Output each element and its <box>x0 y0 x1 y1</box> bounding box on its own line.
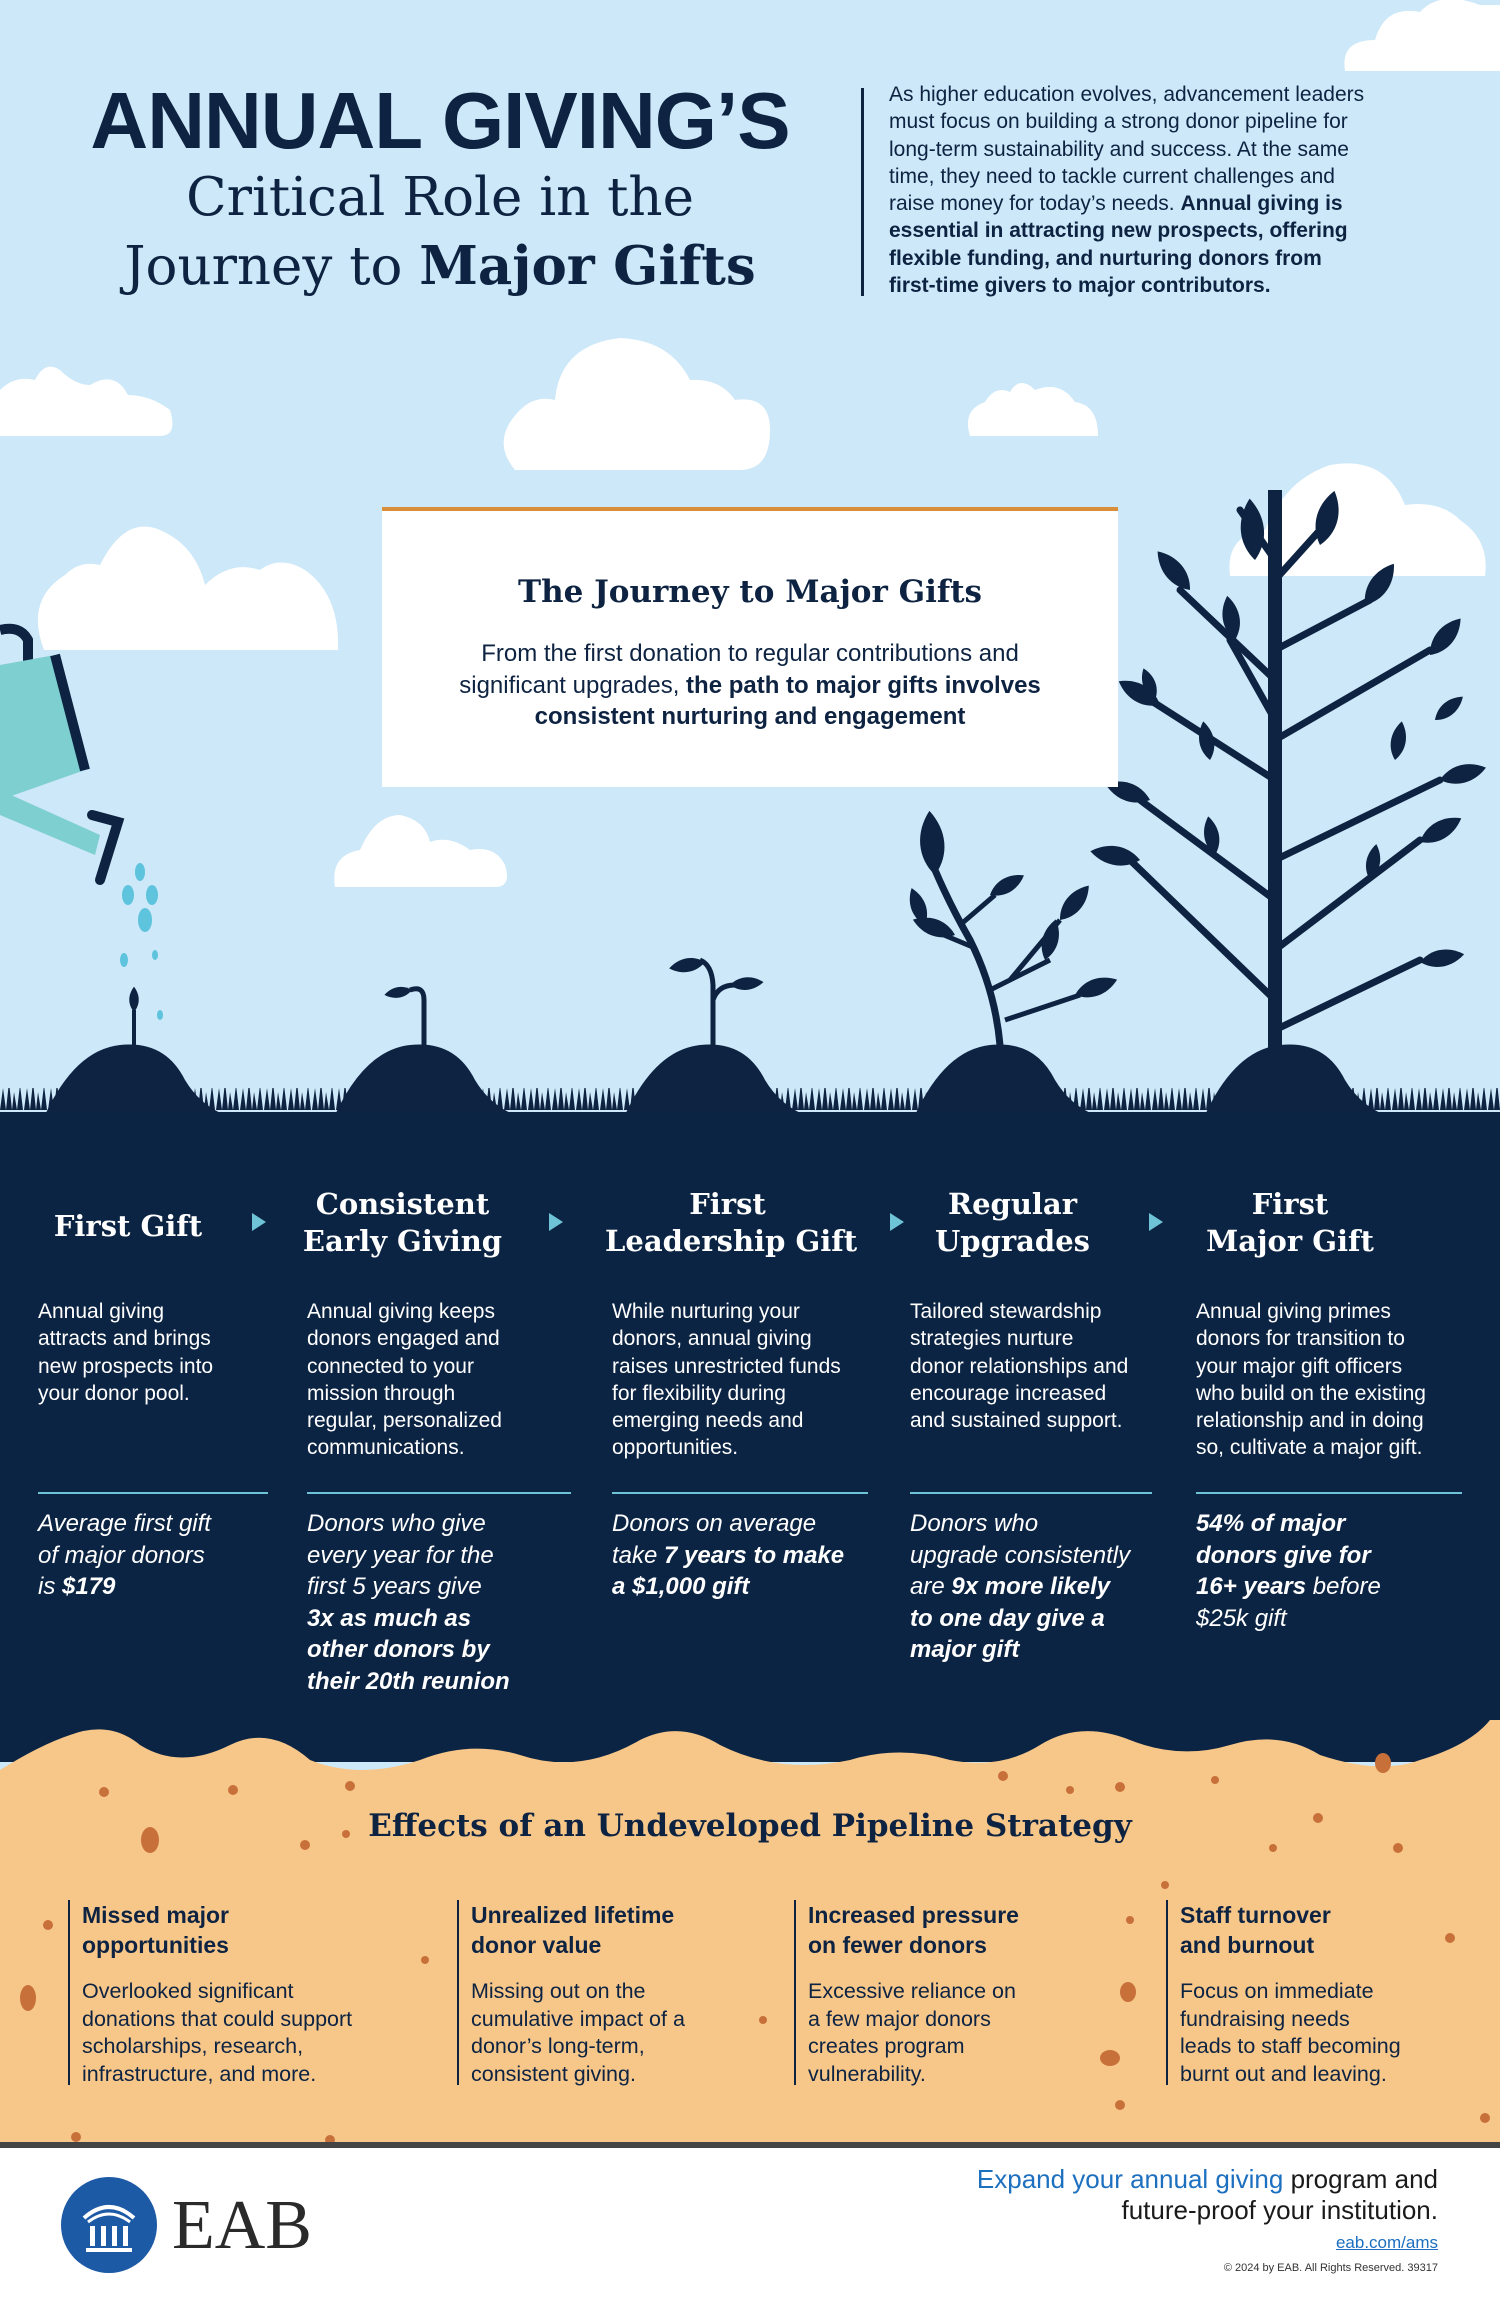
effect: unrealized value: cumulative impact of a <box>471 2006 685 2030</box>
stage: First Leadership Gift: raises unrestricted funds <box>612 1355 841 1378</box>
stage: First Major Gift: Annual giving primes <box>1196 1300 1391 1323</box>
logo: EAB <box>61 2177 312 2273</box>
stage: Regular Upgrades: Donors who <box>910 1510 1038 1537</box>
stage: First Gift: First Gift <box>54 1209 202 1243</box>
stage: Consistent Early Giving: communications. <box>307 1436 465 1459</box>
arrow <box>1149 1213 1163 1231</box>
effect: increased pressure: creates program <box>808 2034 965 2058</box>
effect: missed opportunities: Overlooked significant <box>82 1979 294 2003</box>
panel: journey box <box>382 507 1118 787</box>
effect: staff turnover: Staff turnover <box>1180 1902 1331 1928</box>
stage: Regular Upgrades: are 9x more likely <box>910 1573 1110 1600</box>
intro paragraph: essential in attracting new prospects, offering <box>889 219 1348 242</box>
stage: Consistent Early Giving: other donors by <box>307 1636 490 1663</box>
effect: missed opportunities: infrastructure, and more. <box>82 2062 316 2086</box>
effect: missed opportunities <box>68 1900 428 2085</box>
footer call to action: Expand your annual giving program and <box>977 2164 1438 2194</box>
stage: First Leadership Gift: take 7 years to make <box>612 1542 844 1569</box>
effect: unrealized value: Missing out on the <box>471 1979 646 2003</box>
title: Journey to Major Gifts <box>124 235 756 297</box>
stage: First Major Gift: who build on the existing <box>1196 1382 1426 1405</box>
effect: unrealized value: donor’s long-term, <box>471 2034 645 2058</box>
journey heading: The Journey to Major Gifts <box>518 574 982 610</box>
stage: Regular Upgrades: Upgrades <box>935 1224 1090 1258</box>
title: ANNUAL GIVING’S <box>90 76 790 165</box>
stage: Consistent Early Giving: Consistent <box>316 1187 489 1221</box>
stage: Consistent Early Giving: Annual giving keeps <box>307 1300 495 1323</box>
stage: Regular Upgrades: strategies nurture <box>910 1327 1073 1350</box>
effect: increased pressure: a few major donors <box>808 2006 991 2030</box>
stage: First Major Gift: 54% of major <box>1196 1510 1345 1537</box>
effect: unrealized value: donor value <box>471 1932 601 1958</box>
intro divider <box>861 88 864 296</box>
stage: First Gift: your donor pool. <box>38 1382 190 1405</box>
stage: First Gift: is $179 <box>38 1573 115 1600</box>
stage: First Major Gift: so, cultivate a major gift. <box>1196 1436 1422 1459</box>
title: Critical Role in the <box>186 167 694 228</box>
journey text: significant upgrades, the path to major gifts involves <box>459 672 1041 698</box>
stage: Consistent Early Giving: donors engaged and <box>307 1327 500 1350</box>
arrow <box>252 1213 266 1231</box>
stage: Consistent Early Giving: mission through <box>307 1382 455 1405</box>
stage: Consistent Early Giving: every year for the <box>307 1542 494 1569</box>
effect: unrealized value: consistent giving. <box>471 2062 636 2086</box>
intro paragraph: As higher education evolves, advancement leaders <box>889 83 1364 106</box>
stage: First Major Gift: your major gift officers <box>1196 1355 1402 1378</box>
stage: Consistent Early Giving: Donors who give <box>307 1510 486 1537</box>
effects heading: Effects of an Undeveloped Pipeline Strategy <box>368 1808 1132 1844</box>
stage: First Gift: Average first gift <box>38 1510 211 1537</box>
stage: First Gift: attracts and brings <box>38 1327 211 1350</box>
stage: First Gift: new prospects into <box>38 1355 213 1378</box>
stage: First Gift: of major donors <box>38 1542 205 1569</box>
effect: unrealized value <box>457 1900 757 2085</box>
stage: First Major Gift: Major Gift <box>1206 1224 1374 1258</box>
intro paragraph: raise money for today’s needs. Annual giving is <box>889 192 1343 215</box>
footer call to action: eab.com/ams <box>1336 2233 1438 2252</box>
stage: First Major Gift: $25k gift <box>1196 1605 1287 1632</box>
stage: Regular Upgrades: Regular <box>948 1187 1077 1221</box>
journey text <box>459 640 1041 730</box>
journey text: From the first donation to regular contributions and <box>481 640 1019 667</box>
stage: First Leadership Gift: Leadership Gift <box>605 1224 857 1258</box>
intro paragraph: must focus on building a strong donor pipeline for <box>889 110 1348 133</box>
stage: First Major Gift: donors give for <box>1196 1542 1371 1569</box>
effect: missed opportunities: opportunities <box>82 1932 229 1958</box>
intro paragraph: time, they need to tackle current challenges and <box>889 165 1335 188</box>
effect: increased pressure: on fewer donors <box>808 1932 987 1958</box>
stage: Regular Upgrades: to one day give a <box>910 1605 1105 1632</box>
stage: Regular Upgrades: Tailored stewardship <box>910 1300 1101 1323</box>
panel: journey stages <box>36 1187 1462 1695</box>
effect: staff turnover: burnt out and leaving. <box>1180 2062 1387 2086</box>
effect: missed opportunities: scholarships, research, <box>82 2034 303 2058</box>
stage: Consistent Early Giving: connected to your <box>307 1355 474 1378</box>
stage: First Leadership Gift: a $1,000 gift <box>612 1573 749 1600</box>
effect: staff turnover <box>1166 1900 1466 2085</box>
stage: First Major Gift <box>1196 1187 1462 1632</box>
stage: Consistent Early Giving: 3x as much as <box>307 1605 471 1632</box>
effect: unrealized value: Unrealized lifetime <box>471 1902 674 1928</box>
logo: EAB: EAB <box>172 2187 312 2264</box>
stage: First Major Gift: 16+ years before <box>1196 1573 1381 1600</box>
effect: staff turnover: and burnout <box>1180 1932 1314 1958</box>
footer call to action: © 2024 by EAB. All Rights Reserved. 39317 <box>1224 2262 1438 2274</box>
effect: increased pressure: vulnerability. <box>808 2062 926 2086</box>
effect: staff turnover: fundraising needs <box>1180 2006 1350 2030</box>
footer call to action <box>977 2164 1438 2274</box>
effect: staff turnover: leads to staff becoming <box>1180 2034 1401 2058</box>
journey text: consistent nurturing and engagement <box>535 703 965 730</box>
stage: First Leadership Gift <box>605 1187 868 1600</box>
panel: effects <box>68 1900 1401 2086</box>
stage: Regular Upgrades: and sustained support. <box>910 1409 1122 1432</box>
stage: First Leadership Gift: donors, annual giving <box>612 1327 812 1350</box>
stage: First Gift: Annual giving <box>38 1300 164 1323</box>
stage: First Leadership Gift: While nurturing your <box>612 1300 800 1323</box>
stage: First Leadership Gift: Donors on average <box>612 1510 816 1537</box>
stage: Regular Upgrades: major gift <box>910 1636 1019 1663</box>
stage: First Gift <box>36 1209 268 1600</box>
effect: increased pressure <box>794 1900 1094 2085</box>
stage: First Leadership Gift: emerging needs and <box>612 1409 803 1432</box>
stage: Consistent Early Giving: first 5 years give <box>307 1573 482 1600</box>
arrow <box>890 1213 904 1231</box>
intro paragraph: long-term sustainability and success. At the same <box>889 138 1349 161</box>
stage: First Leadership Gift: for flexibility during <box>612 1382 786 1405</box>
intro paragraph: flexible funding, and nurturing donors from <box>889 247 1322 270</box>
title <box>90 76 790 297</box>
intro paragraph: first-time givers to major contributors. <box>889 274 1271 297</box>
effect: increased pressure: Increased pressure <box>808 1902 1019 1928</box>
stage: Regular Upgrades: upgrade consistently <box>910 1542 1130 1569</box>
footer call to action: future-proof your institution. <box>1122 2195 1438 2225</box>
effect: staff turnover: Focus on immediate <box>1180 1979 1374 2003</box>
stage: Consistent Early Giving: regular, personalized <box>307 1409 502 1432</box>
stage: First Leadership Gift: opportunities. <box>612 1436 738 1459</box>
intro paragraph <box>889 83 1364 297</box>
arrow <box>549 1213 563 1231</box>
stage: First Major Gift: relationship and in doing <box>1196 1409 1424 1432</box>
stage: Consistent Early Giving: Early Giving <box>303 1224 502 1258</box>
effect: missed opportunities: Missed major <box>82 1902 229 1928</box>
stage: Regular Upgrades: encourage increased <box>910 1382 1106 1405</box>
stage: Consistent Early Giving: their 20th reunion <box>307 1668 510 1695</box>
stage: Regular Upgrades: donor relationships and <box>910 1355 1128 1378</box>
effect: increased pressure: Excessive reliance on <box>808 1979 1016 2003</box>
effect: missed opportunities: donations that could support <box>82 2006 352 2030</box>
stage: First Major Gift: First <box>1252 1187 1328 1221</box>
stage: First Leadership Gift: First <box>689 1187 766 1221</box>
stage: First Major Gift: donors for transition to <box>1196 1327 1405 1350</box>
stage: Consistent Early Giving <box>303 1187 571 1695</box>
stage: Regular Upgrades <box>910 1187 1152 1663</box>
